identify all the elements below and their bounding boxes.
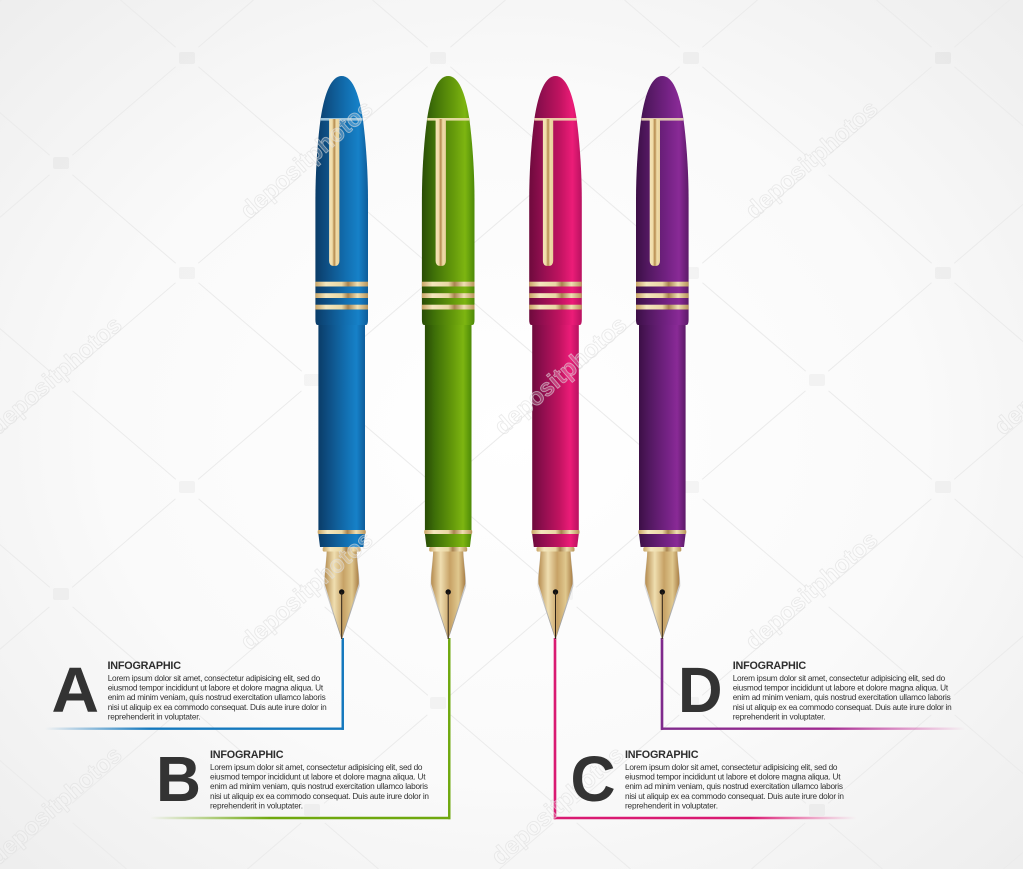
body text C: Lorem ipsum dolor sit amet, consectetur adipisicing elit, sed do	[625, 763, 838, 772]
watermark text: depositphotos	[489, 311, 632, 441]
nib collar	[429, 547, 467, 552]
connector line: B green vertical	[448, 638, 450, 819]
nib collar	[323, 547, 361, 552]
body text D: enim ad minim veniam, quis nostrud exercitation ullamco laboris	[733, 693, 951, 702]
pen barrel	[639, 325, 686, 547]
cap band	[321, 118, 363, 121]
body text A	[108, 674, 327, 721]
body text D: nisi ut aliquip ex ea commodo consequat. Duis aute irure dolor in	[733, 703, 952, 712]
body text D	[733, 674, 952, 721]
pen cap	[315, 76, 368, 325]
pen cap	[422, 76, 474, 325]
pen cap	[529, 76, 582, 325]
cap rings	[422, 282, 474, 310]
body text D: eiusmod tempor incididunt ut labore et dolore magna aliqua. Ut	[733, 684, 949, 693]
connector line: C pink	[555, 638, 856, 818]
connector line: D purple vertical	[661, 638, 663, 730]
connector line: B green	[150, 638, 449, 818]
cap rings	[315, 282, 368, 310]
nib	[644, 552, 680, 640]
letter A: A	[52, 654, 99, 726]
nib	[538, 552, 574, 640]
nib collar	[536, 547, 574, 552]
body text C: enim ad minim veniam, quis nostrud exercitation ullamco laboris	[625, 782, 843, 791]
barrel ring	[532, 530, 580, 534]
heading D: INFOGRAPHIC	[733, 660, 806, 672]
pen clip	[650, 119, 660, 266]
body text D: reprehenderit in voluptater.	[733, 712, 826, 721]
body text A: eiusmod tempor incididunt ut labore et dolore magna aliqua. Ut	[108, 684, 324, 693]
barrel ring	[638, 530, 686, 534]
watermark text: depositphotos	[740, 95, 883, 225]
watermark text: depositphotos	[740, 526, 883, 656]
pen: pink	[529, 76, 582, 640]
cap band	[534, 118, 576, 121]
body text A: Lorem ipsum dolor sit amet, consectetur adipisicing elit, sed do	[108, 674, 321, 683]
body text B: eiusmod tempor incididunt ut labore et dolore magna aliqua. Ut	[210, 773, 426, 782]
barrel ring	[318, 530, 366, 534]
connector line: A blue	[45, 638, 343, 729]
body text B	[210, 763, 429, 810]
body text C	[625, 763, 844, 810]
body text B: reprehenderit in voluptater.	[210, 801, 303, 810]
pen: purple	[636, 76, 689, 640]
body text C: nisi ut aliquip ex ea commodo consequat. Duis aute irure dolor in	[625, 792, 844, 801]
body text A: enim ad minim veniam, quis nostrud exercitation ullamco laboris	[108, 693, 326, 702]
pen clip	[436, 119, 446, 266]
heading B: INFOGRAPHIC	[210, 749, 284, 761]
pen barrel	[425, 325, 472, 547]
pen cap	[636, 76, 689, 325]
heading A: INFOGRAPHIC	[108, 660, 181, 672]
nib	[324, 552, 360, 640]
nib collar	[643, 547, 681, 552]
body text C: reprehenderit in voluptater.	[625, 801, 718, 810]
pen clip	[543, 119, 553, 266]
heading C: INFOGRAPHIC	[625, 749, 699, 761]
body text A: reprehenderit in voluptater.	[108, 712, 201, 721]
block B	[156, 743, 429, 815]
letter B: B	[156, 743, 201, 815]
watermark text: depositphotos	[486, 741, 629, 869]
body text B: Lorem ipsum dolor sit amet, consectetur adipisicing elit, sed do	[210, 763, 423, 772]
watermark camera icons	[53, 52, 951, 816]
cap rings	[636, 282, 689, 310]
cap band	[641, 118, 683, 121]
letter C: C	[570, 743, 616, 815]
block C	[570, 743, 844, 815]
barrel ring	[424, 530, 472, 534]
body text D: Lorem ipsum dolor sit amet, consectetur adipisicing elit, sed do	[733, 674, 946, 683]
connector line: C pink vertical	[554, 638, 556, 819]
pen: blue	[315, 76, 368, 640]
watermark text: depositphotos	[235, 95, 378, 225]
body text C: eiusmod tempor incididunt ut labore et dolore magna aliqua. Ut	[625, 773, 841, 782]
cap band	[427, 118, 469, 121]
connector line: D purple	[662, 638, 965, 729]
letter D: D	[678, 654, 722, 726]
cap rings	[529, 282, 582, 310]
block A	[52, 654, 327, 726]
body text A: nisi ut aliquip ex ea commodo consequat. Duis aute irure dolor in	[108, 703, 327, 712]
body text B: nisi ut aliquip ex ea commodo consequat. Duis aute irure dolor in	[210, 792, 429, 801]
pen: green	[422, 76, 474, 640]
pen clip	[329, 119, 339, 266]
nib	[430, 552, 466, 640]
body text B: enim ad minim veniam, quis nostrud exercitation ullamco laboris	[210, 782, 428, 791]
pen barrel	[318, 325, 365, 547]
watermark text: depositphotos	[235, 526, 378, 656]
pen barrel	[532, 325, 579, 547]
connector line: A blue vertical	[342, 638, 344, 730]
block D	[678, 654, 952, 726]
